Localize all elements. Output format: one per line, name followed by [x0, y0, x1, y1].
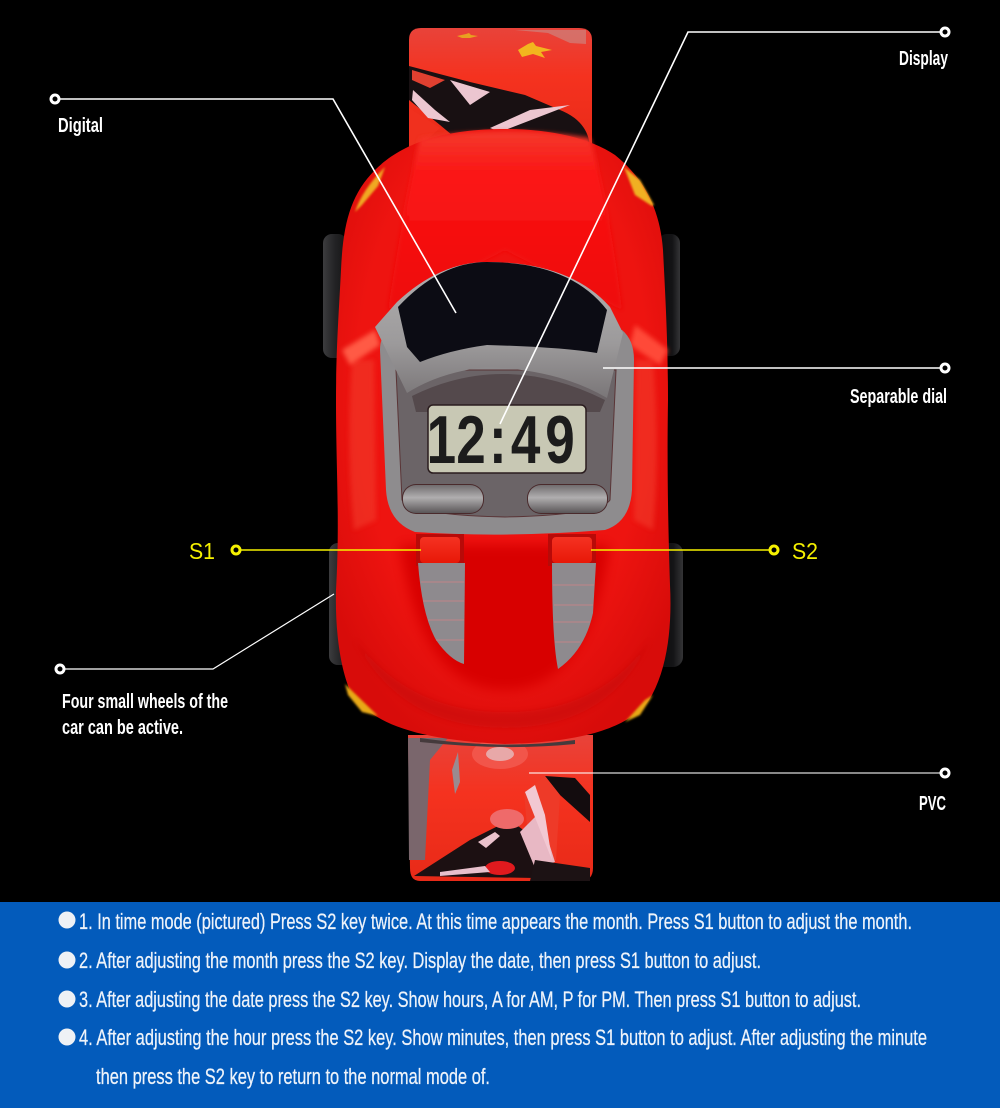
callout: S1	[189, 538, 421, 564]
LCD screen	[427, 402, 586, 477]
silver pill buttons	[402, 484, 608, 514]
rear hump shading	[400, 545, 610, 690]
car body	[336, 129, 670, 747]
LCD time: 9	[545, 402, 575, 477]
step 2: 2. After adjusting the month press the S2 key. Display the date, then press S1 button to adjust.	[79, 948, 761, 973]
windshield glass	[398, 262, 607, 362]
callout: Digital: Digital	[58, 115, 103, 137]
LCD time: :	[489, 402, 507, 477]
step 4: then press the S2 key to return to the normal mode of.	[96, 1064, 490, 1089]
hood highlights	[388, 132, 622, 310]
callout: Display	[500, 28, 949, 424]
lower strap	[408, 735, 593, 881]
callout: wheels: Four small wheels of the	[62, 691, 228, 713]
watch illustration	[323, 28, 683, 881]
callout: S2: S2	[792, 538, 818, 564]
silver dial frame	[380, 330, 634, 535]
callout: Digital	[51, 95, 456, 313]
LCD time: 4	[511, 402, 540, 477]
callout: PVC: PVC	[919, 793, 946, 815]
callout: Display: Display	[899, 48, 949, 70]
windshield silver surround	[375, 262, 623, 398]
yellow headlight accents	[355, 167, 385, 212]
callout: wheels: car can be active.	[62, 717, 183, 739]
step 4	[58, 1025, 927, 1089]
callout: wheels	[56, 594, 334, 739]
panel: instructions	[0, 902, 1000, 1108]
callout: Separable dial	[603, 364, 949, 408]
LCD time: 2	[456, 402, 486, 477]
callout: S1: S1	[189, 538, 215, 564]
callout: Separable dial: Separable dial	[850, 386, 947, 408]
upper strap	[409, 28, 592, 150]
LCD time: 1	[427, 402, 456, 477]
red push buttons	[416, 534, 596, 566]
wheels	[323, 234, 683, 667]
callout: PVC	[529, 769, 949, 815]
silver grilles	[418, 563, 596, 669]
callout: S2	[591, 538, 818, 564]
